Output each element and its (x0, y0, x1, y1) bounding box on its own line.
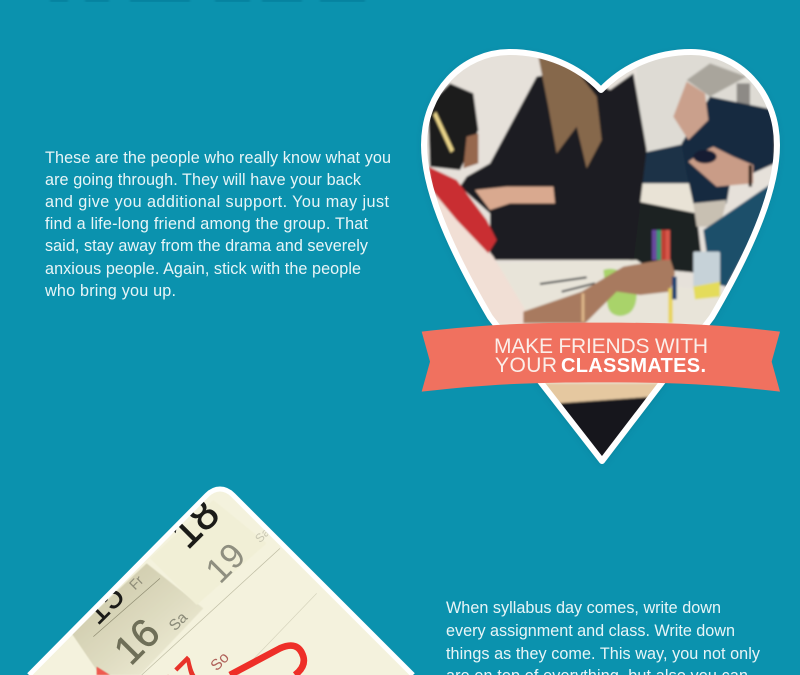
ribbon text (494, 335, 708, 377)
heading remnant cut off at the top edge (50, 0, 365, 2)
heart photo: students at a table (427, 55, 774, 456)
ribbon text: CLASSMATES. (561, 355, 706, 377)
text block: classmates paragraph (44, 149, 391, 300)
calendar dates: 19 (198, 536, 253, 591)
ribbon banner (422, 323, 780, 392)
text block: classmates paragraph: find a life-long friend among the group. That (45, 215, 368, 233)
text block: syllabus paragraph: every assignment and class. Write down (446, 622, 735, 640)
calendar photo frame (27, 486, 415, 675)
calendar dates: Sa (166, 609, 191, 634)
heart drop shadow backing (424, 52, 777, 461)
text block: syllabus paragraph (446, 599, 761, 675)
calendar dates: So (207, 649, 233, 674)
ribbon text: MAKE FRIENDS WITH (494, 335, 708, 358)
text block: classmates paragraph: and give you additional support. You may just (45, 193, 390, 211)
calendar photo (32, 492, 410, 675)
calendar dates: Fr (126, 572, 147, 593)
text block: syllabus paragraph: When syllabus day comes, write down (446, 599, 721, 617)
calendar dates: 15 (74, 574, 132, 632)
calendar dates: Sa (252, 525, 273, 545)
text block: classmates paragraph: who bring you up. (44, 282, 176, 300)
text block: classmates paragraph: are going through. They will have your back (45, 171, 362, 189)
text block: classmates paragraph: said, stay away from the drama and severely (45, 237, 369, 255)
calendar dates (74, 490, 273, 675)
ribbon text: YOUR (495, 354, 557, 377)
text block: classmates paragraph: anxious people. Again, stick with the people (45, 260, 361, 278)
calendar dates: 18 (161, 490, 229, 558)
calendar white border (29, 489, 413, 675)
icon: red paperclip (230, 646, 304, 675)
text block: classmates paragraph: These are the people who really know what you (45, 149, 391, 167)
heart white border (424, 52, 777, 461)
calendar dates: 16 (106, 610, 168, 673)
text block: syllabus paragraph: things as they come. This way, you not only (446, 645, 761, 663)
heart photo frame (410, 40, 790, 470)
